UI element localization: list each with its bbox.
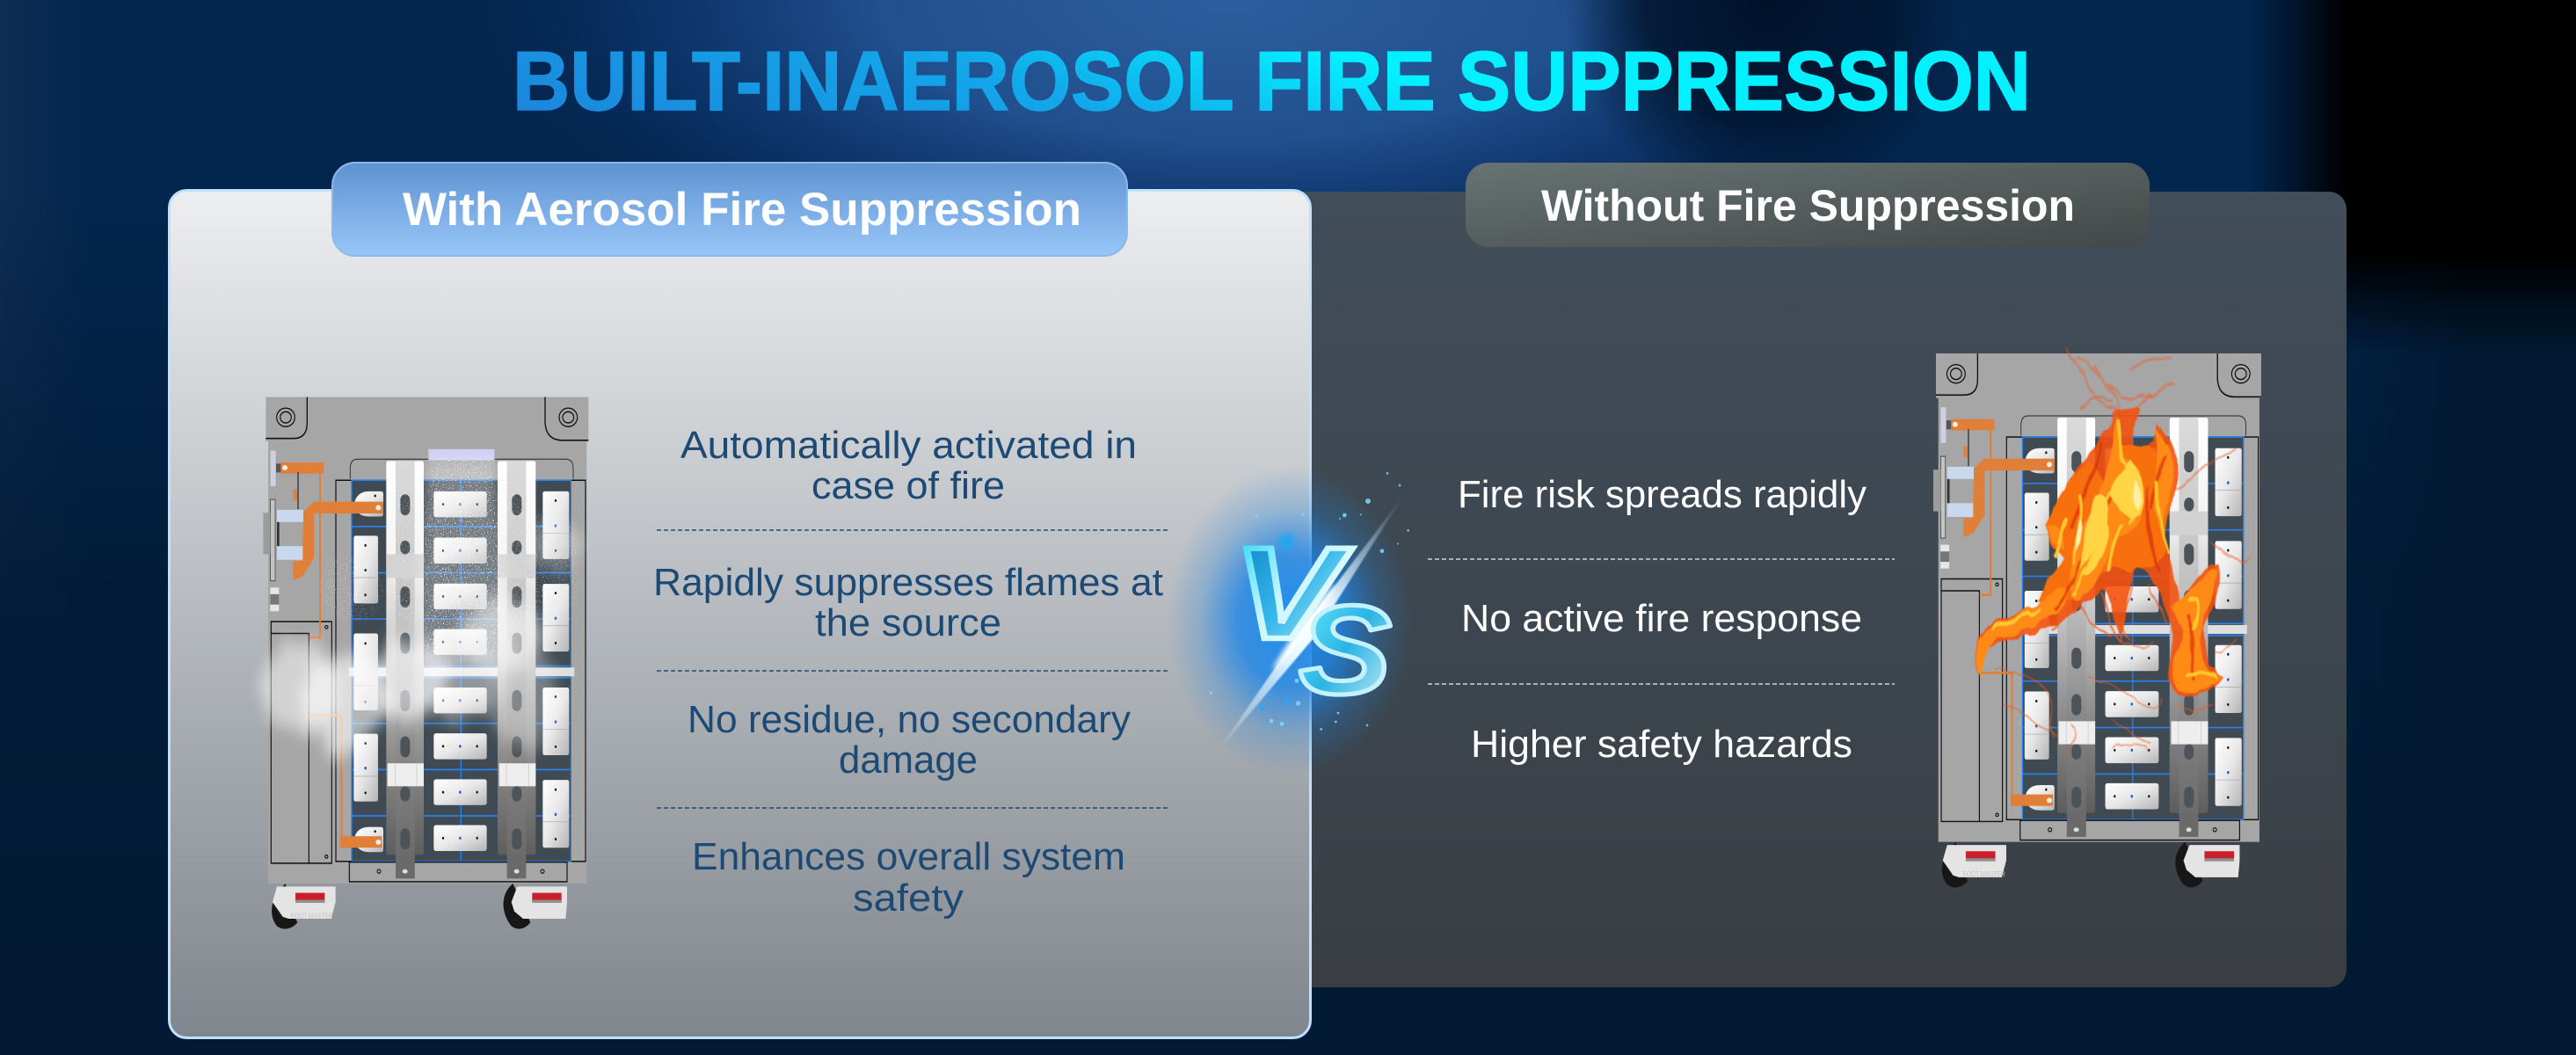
left column bullet list <box>653 424 1169 920</box>
left column bullet list: safety <box>853 877 964 920</box>
badge: with aerosol: With Aerosol Fire Suppression <box>403 184 1081 236</box>
badge: with aerosol <box>332 163 1127 256</box>
aerosol generator <box>428 449 494 461</box>
illustration: cabinet on fire <box>1933 349 2261 887</box>
flames <box>1975 349 2248 756</box>
left column bullet list: case of fire <box>811 464 1005 507</box>
title: BUILT-INAEROSOL FIRE SUPPRESSION <box>513 34 2031 128</box>
bullet: residue: No residue, no secondary <box>688 698 1131 741</box>
particles <box>1210 472 1409 731</box>
light streak <box>1216 495 1404 753</box>
illustration: cabinet with aerosol spray and smoke <box>263 397 588 929</box>
V: V <box>1233 521 1353 666</box>
bullet: fire risk: Fire risk spreads rapidly <box>1458 473 1867 516</box>
S: S <box>1299 579 1392 721</box>
smoke cloud <box>264 521 574 748</box>
spray specks <box>317 455 586 669</box>
badge: without fire suppression: Without Fire Suppression <box>1541 181 2075 230</box>
vs badge <box>1167 466 1413 776</box>
panel: without fire suppression <box>1266 192 2347 987</box>
bullet: automatic: Automatically activated in <box>680 424 1137 467</box>
right column bullet list <box>1428 473 1895 766</box>
panel: with aerosol fire suppression <box>169 190 1310 1037</box>
glow <box>1167 466 1413 776</box>
badge: without fire suppression <box>1466 163 2150 247</box>
bullet: safety: Enhances overall system <box>692 835 1125 878</box>
bullet: hazards: Higher safety hazards <box>1471 723 1852 766</box>
caster brand: FOOT MASTER <box>1963 869 2005 878</box>
caster brand: FOOT MASTER <box>291 912 333 920</box>
left column bullet list: damage <box>839 738 978 782</box>
background <box>0 0 2576 559</box>
left column bullet list: the source <box>815 601 1001 644</box>
bullet: flames: Rapidly suppresses flames at <box>653 561 1163 604</box>
bullet: no response: No active fire response <box>1461 597 1862 640</box>
